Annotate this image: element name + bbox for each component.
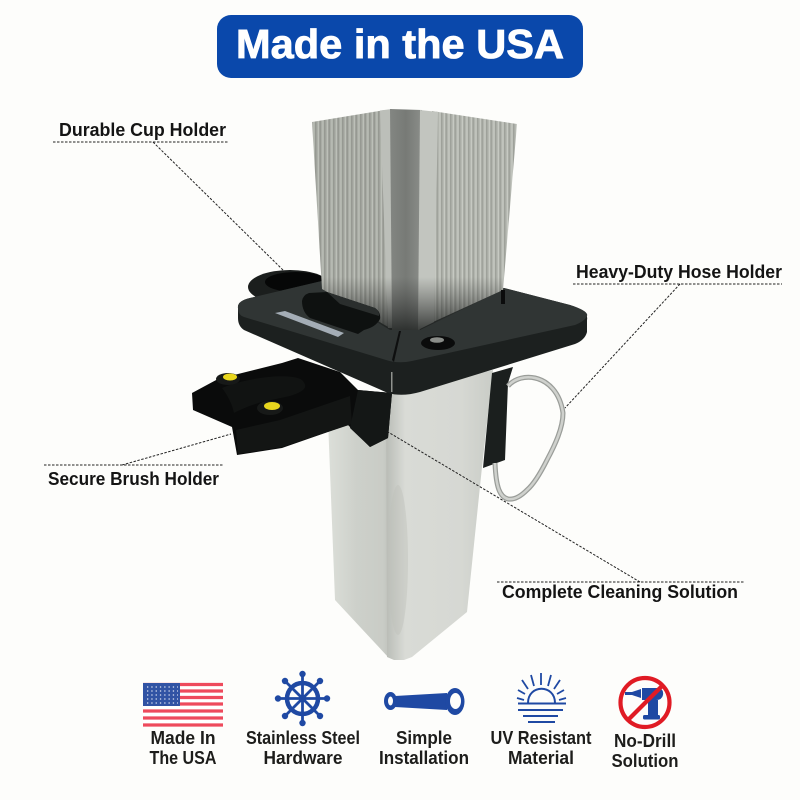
black mounting plate [238, 280, 587, 395]
lower aluminium post [328, 370, 493, 660]
callout: secure brush holder: Secure Brush Holder [48, 469, 219, 489]
black rubber latch [302, 292, 380, 334]
callout: secure brush holder [44, 434, 231, 489]
plate mounting hole [421, 336, 455, 350]
feature: simple installation [379, 688, 469, 768]
hose holder bracket and stainless loop [483, 367, 563, 499]
feature: UV resistant material [490, 673, 592, 768]
label: Simple [396, 728, 452, 748]
feature: stainless steel hardware: Hardware [264, 748, 342, 768]
callout: complete cleaning solution: Complete Cleaning Solution [502, 582, 738, 602]
feature: made in the USA: The USA [150, 748, 216, 768]
product photo: pole-mounted caddy [192, 109, 587, 660]
icon: wrench [384, 688, 464, 715]
cup holder ring [248, 270, 332, 304]
plate label [275, 311, 344, 337]
callout: complete cleaning solution [388, 432, 744, 602]
yellow button front [257, 401, 283, 415]
callout: heavy-duty hose holder: Heavy-Duty Hose Holder [576, 262, 782, 282]
feature: no-drill solution [612, 678, 678, 771]
brush holder arm [192, 358, 392, 455]
title banner: Made in the USA [236, 21, 564, 67]
label: Stainless Steel [246, 728, 360, 748]
icon: ship wheel [275, 671, 330, 726]
callout: durable cup holder [53, 120, 285, 272]
icon: sun over water [517, 673, 566, 722]
feature: simple installation: Installation [379, 748, 469, 768]
icon: crossed-out drill [620, 678, 670, 727]
callout: heavy-duty hose holder [565, 262, 782, 408]
icon: american flag [143, 683, 223, 727]
label: Made In [150, 728, 216, 748]
feature: UV resistant material: Material [508, 748, 574, 768]
feature: made in the USA [143, 683, 223, 768]
callout: durable cup holder: Durable Cup Holder [59, 120, 226, 140]
feature: stainless steel hardware [246, 671, 360, 768]
upper aluminium post [312, 109, 517, 330]
yellow button top [216, 373, 240, 385]
title banner [217, 15, 583, 78]
label: No-Drill [614, 731, 676, 751]
label: UV Resistant [490, 728, 592, 748]
feature: no-drill solution: Solution [612, 751, 678, 771]
